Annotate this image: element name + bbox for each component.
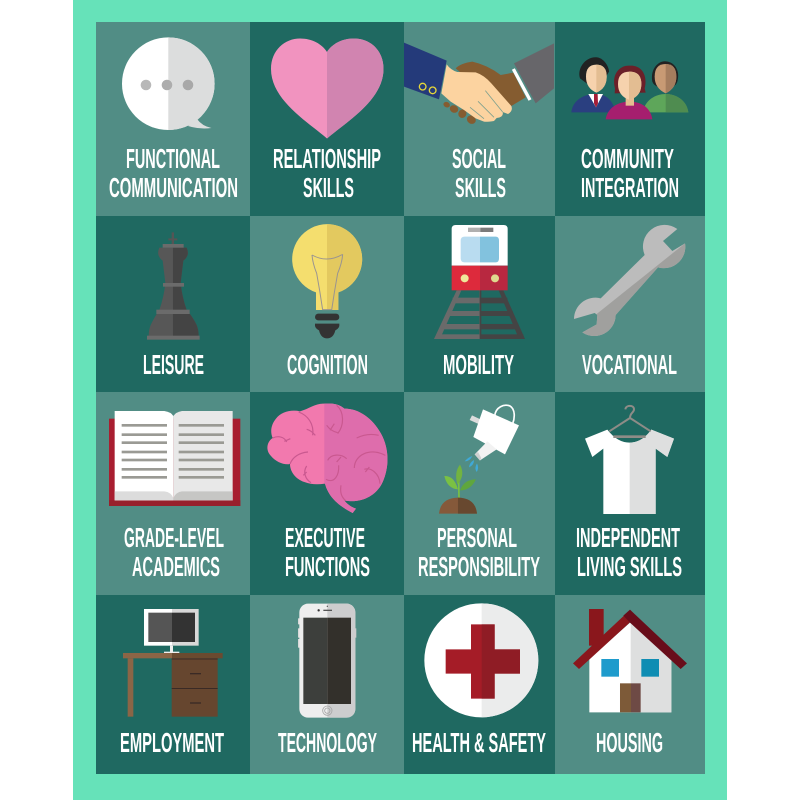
- label: mobility: MOBILITY: [443, 349, 514, 380]
- person: third: [643, 61, 688, 112]
- label: personal responsibility: RESPONSIBILITY: [418, 551, 540, 582]
- label: grade-level academics: GRADE-LEVEL: [124, 522, 224, 553]
- icon: open book: [109, 411, 240, 506]
- label: grade-level academics: [124, 522, 224, 582]
- label: executive functions: FUNCTIONS: [285, 551, 370, 582]
- icon: watering can and plant: [439, 405, 519, 514]
- railway track: [434, 290, 525, 339]
- icon: desk with computer: [123, 609, 223, 717]
- label: relationship skills: RELATIONSHIP: [273, 143, 381, 174]
- label: social skills: [452, 143, 506, 203]
- panel: health and safety: [404, 595, 555, 774]
- label: independent living skills: INDEPENDENT: [576, 522, 680, 553]
- label: housing: HOUSING: [596, 727, 663, 758]
- icon: chess king: [147, 232, 200, 340]
- label: functional communication: [109, 143, 238, 203]
- icon: speech bubble: [122, 37, 215, 130]
- label: grade-level academics: ACADEMICS: [132, 551, 220, 582]
- panel: employment: [96, 595, 250, 774]
- person: woman: [606, 66, 652, 119]
- label: vocational: VOCATIONAL: [582, 349, 677, 380]
- label: community integration: [581, 143, 679, 203]
- label: personal responsibility: PERSONAL: [437, 522, 517, 553]
- panel: leisure: [96, 216, 250, 392]
- icon: house: [573, 609, 687, 712]
- panel: technology: [250, 595, 404, 774]
- icon: train on tracks: [434, 225, 525, 339]
- panel: grade-level academics: [96, 392, 250, 595]
- label: technology: TECHNOLOGY: [278, 727, 377, 758]
- label: functional communication: FUNCTIONAL: [126, 143, 220, 174]
- label: cognition: COGNITION: [287, 349, 368, 380]
- panel: relationship skills: [250, 22, 404, 216]
- label: employment: EMPLOYMENT: [120, 727, 224, 758]
- label: personal responsibility: [418, 522, 540, 582]
- icon: group of people: [571, 57, 688, 119]
- label: independent living skills: LIVING SKILLS: [577, 551, 682, 582]
- label: health and safety: HEALTH & SAFETY: [412, 727, 546, 758]
- icon: heart: [271, 38, 384, 138]
- icon: brain: [267, 403, 387, 513]
- label: executive functions: [285, 522, 370, 582]
- panel: housing: [555, 595, 705, 774]
- panel: functional communication: [96, 22, 250, 216]
- person: man in suit: [571, 57, 616, 112]
- icon: medical cross: [424, 603, 538, 717]
- label: community integration: INTEGRATION: [581, 172, 679, 203]
- panel: personal responsibility: [404, 392, 555, 595]
- icon: wrench: [574, 225, 685, 336]
- label: functional communication: COMMUNICATION: [109, 172, 238, 203]
- label: social skills: SOCIAL: [452, 143, 506, 174]
- panel: executive functions: [250, 392, 404, 595]
- label: social skills: SKILLS: [455, 172, 506, 203]
- panel: social skills: [404, 22, 555, 216]
- panel: mobility: [404, 216, 555, 392]
- icon: handshake: [404, 43, 554, 126]
- label: relationship skills: SKILLS: [303, 172, 354, 203]
- icon: smartphone: [298, 604, 356, 718]
- label: community integration: COMMUNITY: [581, 143, 674, 174]
- icon: t-shirt on hanger: [585, 406, 674, 514]
- label: relationship skills: [273, 143, 381, 203]
- label: independent living skills: [576, 522, 682, 582]
- label: executive functions: EXECUTIVE: [285, 522, 365, 553]
- panel: vocational: [555, 216, 705, 392]
- icon: light bulb: [292, 224, 362, 338]
- panel: cognition: [250, 216, 404, 392]
- panel: independent living skills: [555, 392, 705, 595]
- label: leisure: LEISURE: [143, 349, 204, 380]
- panel: community integration: [555, 22, 705, 216]
